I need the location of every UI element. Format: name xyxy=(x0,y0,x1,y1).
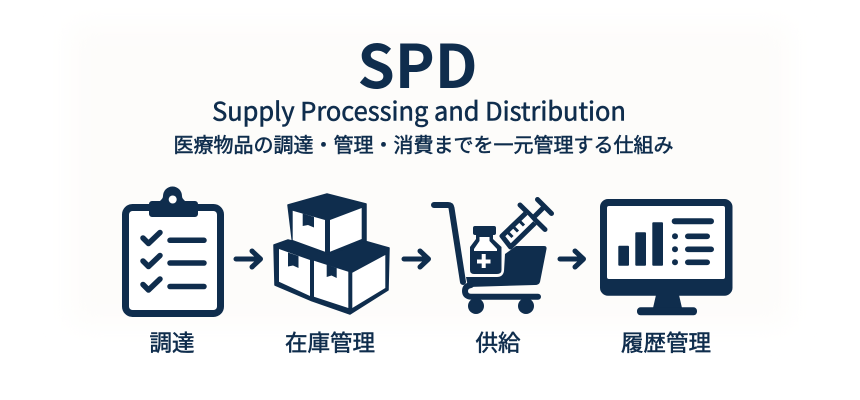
tagline: 医療物品の調達・管理・消費までを一元管理する仕組み xyxy=(174,129,674,158)
icon: cart with vial and syringe xyxy=(434,200,552,314)
arrow: procurement to inventory xyxy=(236,251,260,267)
subtitle: Supply Processing and Distribution xyxy=(212,92,626,128)
arrow: inventory to supply xyxy=(404,251,428,267)
icon: clipboard with checklist xyxy=(126,186,220,314)
arrow: supply to history xyxy=(560,251,584,267)
label: procurement: 調達 xyxy=(149,326,195,358)
title: SPD xyxy=(357,19,478,106)
label: history management: 履歴管理 xyxy=(621,326,711,358)
icon: monitor with chart xyxy=(600,199,732,315)
label: inventory management: 在庫管理 xyxy=(285,326,375,358)
icon: stacked boxes xyxy=(274,194,389,314)
label: supply: 供給 xyxy=(475,326,521,358)
